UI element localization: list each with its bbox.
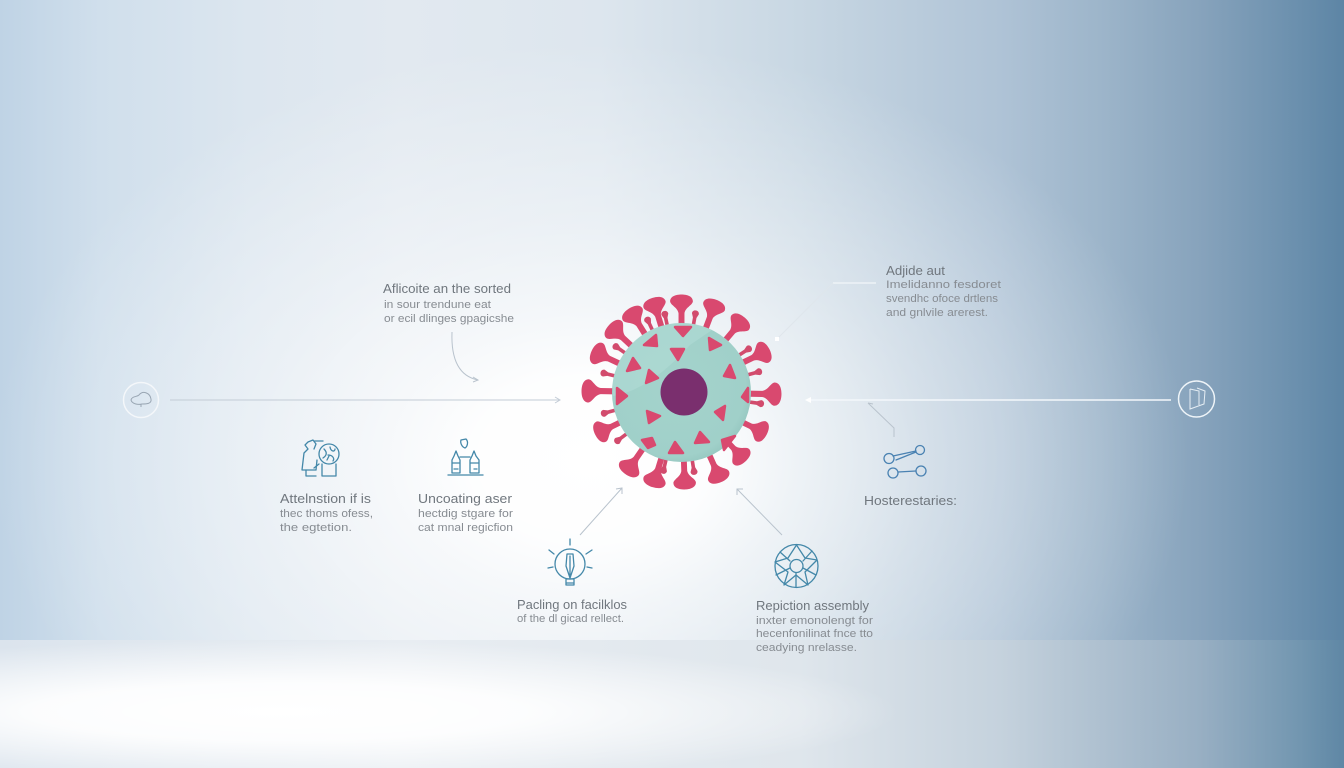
surface protein triangles (617, 327, 748, 453)
icon: light bulb (548, 539, 592, 585)
small spikes (600, 310, 765, 475)
icon: attachment (302, 440, 339, 476)
block: top-right callout text: Imelidanno fesdoret (886, 279, 1001, 291)
text: assembly: inxter emonolengt for (756, 615, 873, 627)
icon: right door (1178, 381, 1214, 417)
text: packing: of the dl gicad rellect. (517, 613, 624, 625)
body sheen (613, 323, 712, 396)
block: top-right callout text: and gnlvile arerest. (886, 307, 988, 319)
text: uncoating: Uncoating aser (418, 491, 513, 506)
text: assembly (756, 598, 873, 654)
arrow: lower-left (580, 488, 622, 535)
text: packing (517, 597, 627, 625)
text: attachment: Attelnstion if is (280, 491, 372, 506)
icon: host factors (884, 446, 926, 478)
block: top-left callout text: in sour trendune eat (384, 299, 491, 311)
block: top-right callout text (886, 263, 1001, 319)
virus (581, 294, 782, 491)
text: host factors: Hosterestaries: (864, 493, 957, 508)
text: packing: Pacling on facilklos (517, 597, 627, 612)
virus core (660, 368, 708, 416)
block: top-right callout text: Adjide aut (886, 263, 945, 278)
text: uncoating: cat mnal regicfion (418, 522, 513, 534)
line: left entry arrow (170, 397, 560, 403)
block: top-left callout text: or ecil dlinges gpagicshe (384, 313, 514, 325)
virus body (612, 323, 751, 462)
block: top-right callout text: svendhc ofoce drtlens (886, 293, 999, 305)
floor band (0, 640, 1344, 768)
arrow: host factors (868, 403, 894, 437)
arrow: top-right callout (775, 283, 876, 341)
text: uncoating: hectdig stgare for (418, 508, 513, 520)
text: assembly: hecenfonilinat fnce tto (756, 628, 873, 640)
text: attachment (280, 491, 373, 534)
large spikes (581, 294, 782, 491)
arrow: lower-right (737, 489, 782, 535)
text: attachment: thec thoms ofess, (280, 508, 373, 520)
text: attachment: the egtetion. (280, 522, 352, 534)
arrow: top-left callout (452, 332, 478, 382)
icon: assembly (775, 544, 818, 588)
icon: uncoating (448, 439, 483, 475)
block: top-left callout text: Aflicoite an the sorted (383, 281, 511, 296)
line: right exit arrow (805, 397, 1171, 403)
text: uncoating (418, 491, 513, 534)
block: top-left callout text (383, 281, 514, 325)
text: assembly: Repiction assembly (756, 598, 869, 613)
icon: left cell (124, 382, 158, 418)
text: assembly: ceadying nrelasse. (756, 642, 857, 654)
